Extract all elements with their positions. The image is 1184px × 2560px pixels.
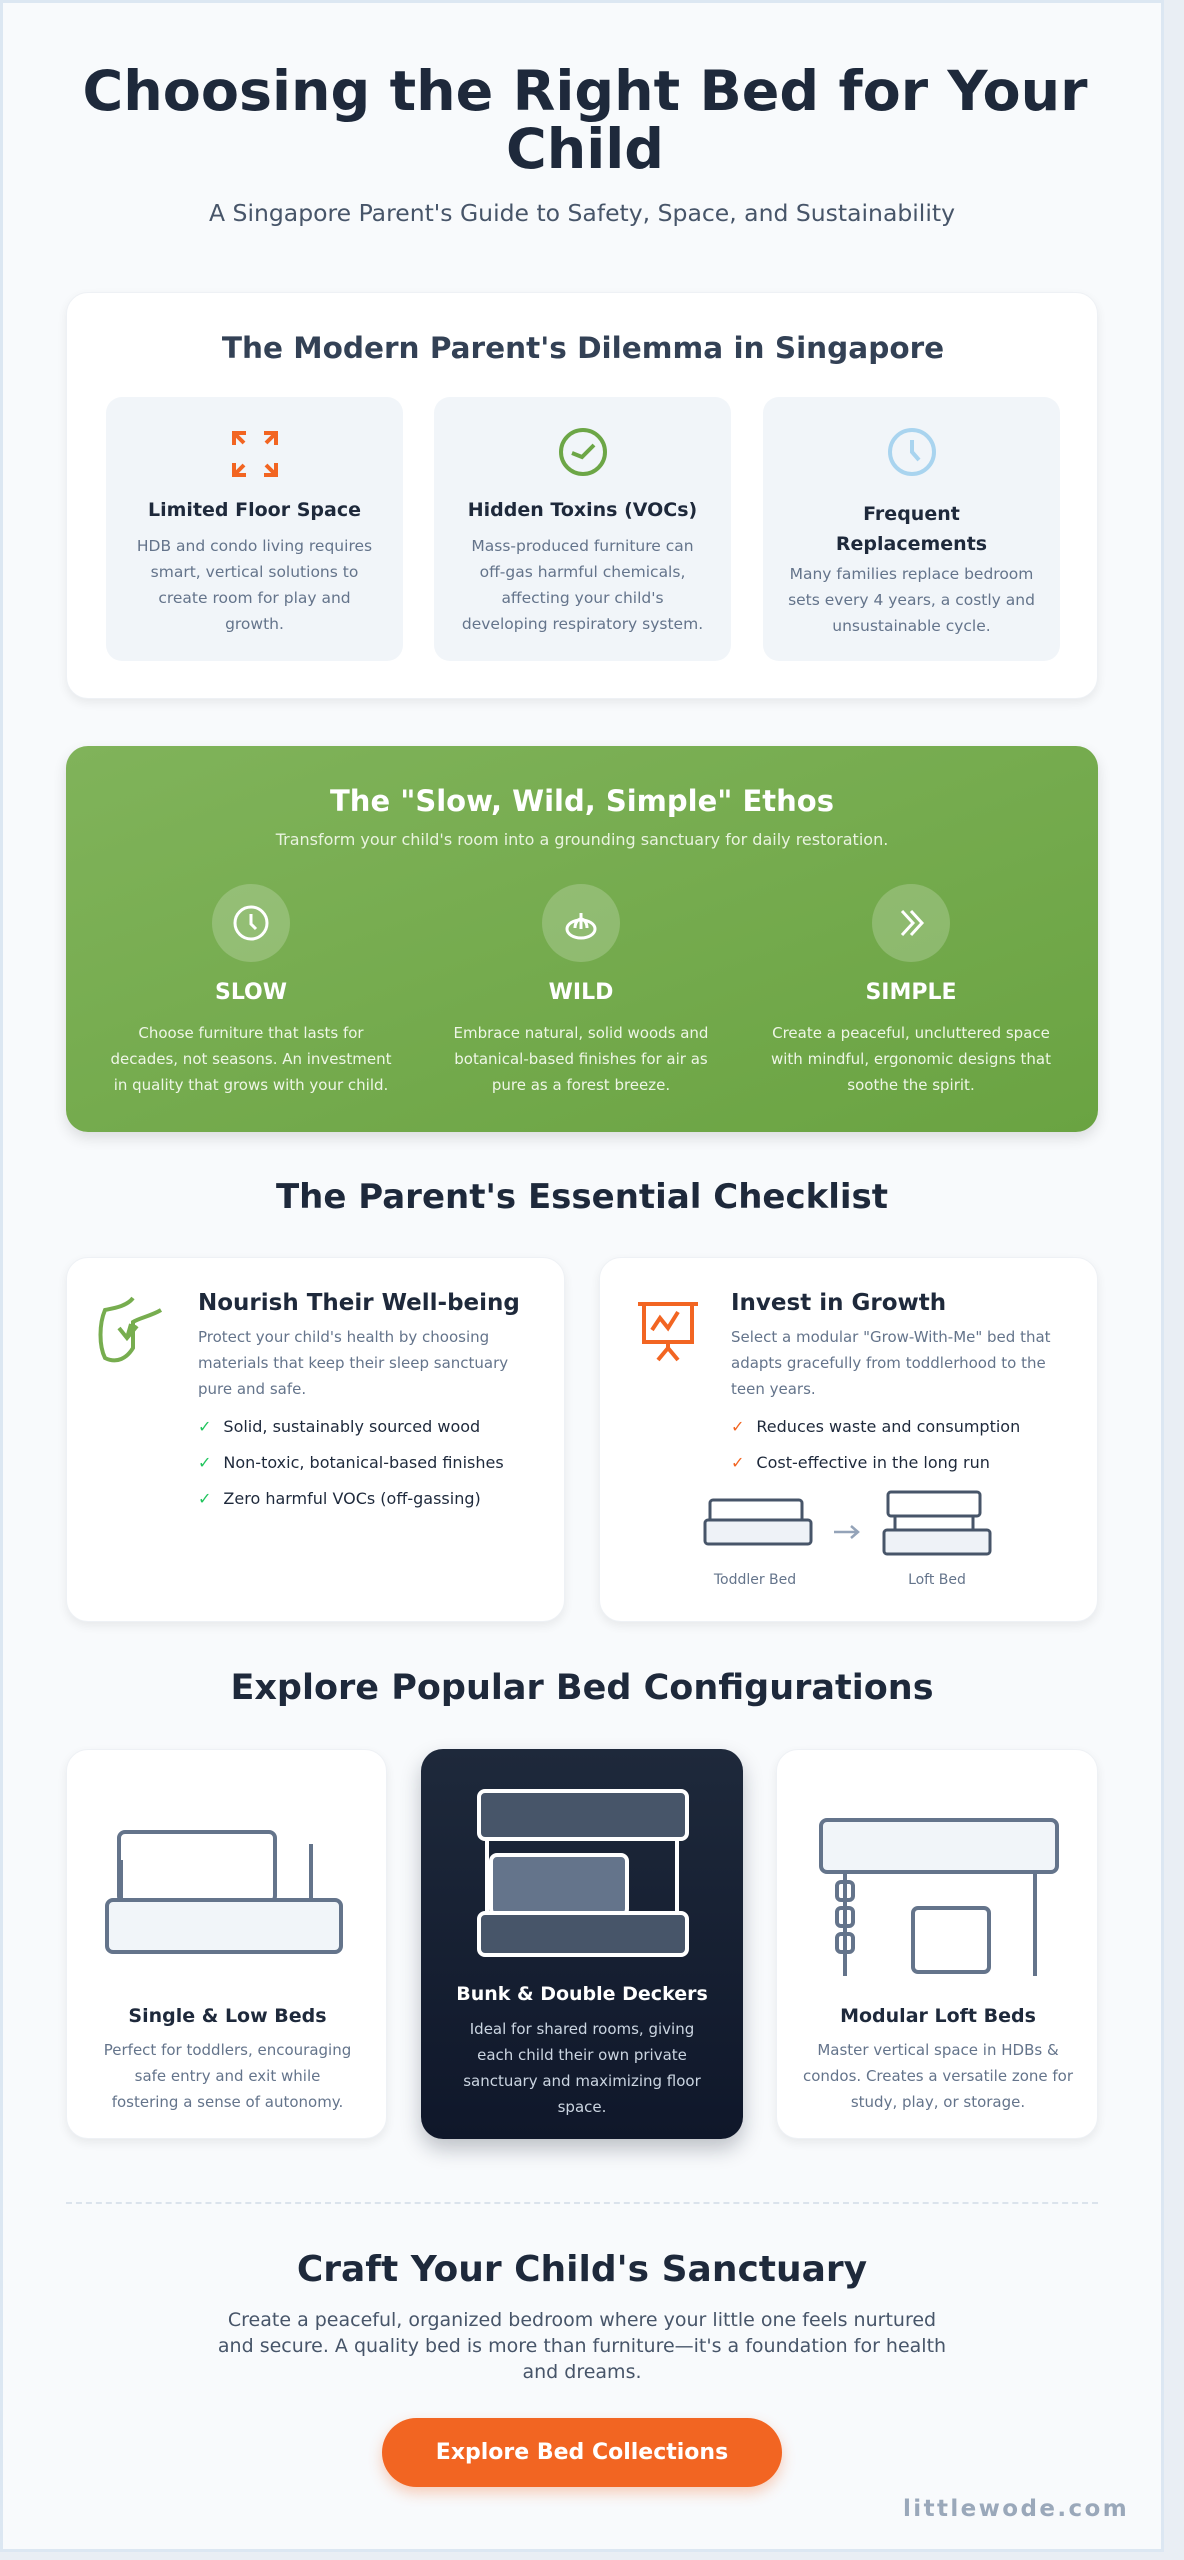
pillar: slow: Choose furniture that lasts for decades, not seasons. An investment in quality that grows with your child. <box>111 1024 391 1094</box>
pillar: wild: Embrace natural, solid woods and botanical-based finishes for air as pure as a forest breeze. <box>454 1024 708 1094</box>
checklist: ✓ Cost-effective in the long run <box>731 1453 990 1472</box>
pillar: simple <box>771 884 1051 1094</box>
title: Nourish Their Well-being <box>198 1290 520 1316</box>
pillar: simple: Create a peaceful, uncluttered space with mindful, ergonomic designs that soothe the spirit. <box>771 1024 1051 1094</box>
icon: low bed <box>105 1830 343 1954</box>
pillar: wild <box>454 884 708 1094</box>
text: closing: and secure. A quality bed is more than furniture—it's a foundation for health <box>218 2335 946 2357</box>
subtitle: A Singapore Parent's Guide to Safety, Space, and Sustainability <box>209 199 955 227</box>
text: Protect your child's health by choosing materials that keep their sleep sanctuary pure and safe. <box>198 1328 508 1398</box>
icon: clock <box>212 884 290 962</box>
title: Frequent Replacements <box>836 503 987 555</box>
icon: bunk bed <box>477 1789 689 1957</box>
sub-card: floor space <box>106 397 403 661</box>
checklist <box>731 1417 1020 1472</box>
icon: clock <box>888 428 936 476</box>
heading: checklist: The Parent's Essential Checklist <box>276 1177 888 1217</box>
icon: presentation chart <box>638 1302 698 1362</box>
text: HDB and condo living requires smart, vertical solutions to create room for play and growth. <box>137 537 372 633</box>
label: toddler bed: Toddler Bed <box>714 1572 796 1588</box>
card: modular loft <box>776 1749 1098 2139</box>
icon: expand arrows <box>232 431 278 477</box>
button: Explore Bed Collections <box>436 2440 728 2465</box>
card: single & low <box>66 1749 387 2139</box>
text: safe entry and exit while <box>135 2067 320 2085</box>
panel: ethos <box>66 746 1098 1132</box>
text: Master vertical space in HDBs & condos. Creates a versatile zone for study, play, or storage. <box>803 2041 1073 2111</box>
title: Bunk & Double Deckers <box>456 1983 708 2005</box>
heading: dilemma: The Modern Parent's Dilemma in Singapore <box>222 331 944 365</box>
button <box>382 2418 782 2487</box>
pillar: wild: WILD <box>549 980 613 1005</box>
icon: loft bed <box>819 1818 1059 1976</box>
heading: configurations: Explore Popular Bed Configurations <box>230 1668 934 1708</box>
text: Ideal for shared rooms, giving each child their own private sanctuary and maximizing floor space. <box>463 2020 701 2116</box>
text: closing: and dreams. <box>522 2361 642 2383</box>
title: Limited Floor Space <box>148 499 361 521</box>
pillar: slow: SLOW <box>215 980 287 1005</box>
checklist: ✓ Solid, sustainably sourced wood <box>198 1417 480 1436</box>
card: bunk (dark) <box>421 1749 743 2139</box>
title: Choosing the Right Bed for Your Child <box>82 59 1088 182</box>
title: Hidden Toxins (VOCs) <box>468 499 697 521</box>
icon: leaf drop <box>542 884 620 962</box>
label: loft bed: Loft Bed <box>908 1572 966 1588</box>
checklist: ✓ Reduces waste and consumption <box>731 1417 1020 1436</box>
icon: leaf shield <box>98 1296 162 1362</box>
text: Mass-produced furniture can off-gas harmful chemicals, affecting your child's developing respiratory system. <box>462 537 703 633</box>
heading: ethos: The "Slow, Wild, Simple" Ethos <box>330 784 834 818</box>
heading: craft sanctuary: Craft Your Child's Sanctuary <box>297 2249 867 2290</box>
panel: dilemma <box>66 292 1098 699</box>
watermark: littlewode.com <box>903 2496 1129 2522</box>
title: Single & Low Beds <box>128 2005 327 2027</box>
text: Many families replace bedroom sets every 4 years, a costly and unsustainable cycle. <box>788 565 1035 635</box>
checklist: ✓ Zero harmful VOCs (off-gassing) <box>198 1489 481 1508</box>
checklist <box>198 1417 504 1508</box>
icon: chevrons <box>872 884 950 962</box>
text: closing <box>218 2309 946 2383</box>
sub-card: replacements <box>763 397 1060 661</box>
diagram: toddler to loft <box>704 1490 992 1556</box>
pillar: slow <box>111 884 392 1094</box>
text: Select a modular "Grow-With-Me" bed that adapts gracefully from toddlerhood to the teen years. <box>731 1328 1051 1398</box>
panel: well-being <box>66 1257 565 1622</box>
text: fostering a sense of autonomy. <box>112 2093 343 2111</box>
title: Modular Loft Beds <box>840 2005 1036 2027</box>
text <box>104 2041 351 2111</box>
icon: green leaf circle <box>559 428 607 476</box>
panel: growth <box>599 1257 1098 1622</box>
checklist: ✓ Non-toxic, botanical-based finishes <box>198 1453 504 1472</box>
pillar: simple: SIMPLE <box>865 980 957 1005</box>
sub-card: toxins <box>434 397 731 661</box>
title: Invest in Growth <box>731 1290 946 1316</box>
text: Perfect for toddlers, encouraging <box>104 2041 351 2059</box>
text: closing: Create a peaceful, organized bedroom where your little one feels nurtured <box>228 2309 936 2331</box>
subheading: Transform your child's room into a grounding sanctuary for daily restoration. <box>276 830 888 849</box>
